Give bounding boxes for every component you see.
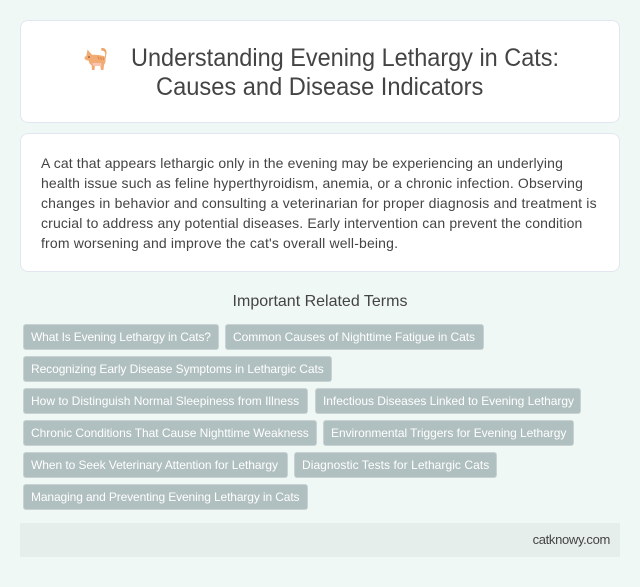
summary text: changes in behavior and consulting a veterinarian for proper diagnosis and treatment is xyxy=(41,195,597,211)
summary text: from worsening and improve the cat's overall well-being. xyxy=(41,235,398,251)
title card xyxy=(20,20,620,123)
tag xyxy=(225,324,484,350)
heading: Understanding Evening Lethargy in Cats: xyxy=(131,44,559,72)
summary text: health issue such as feline hyperthyroidism, anemia, or a chronic infection. Observing xyxy=(41,175,583,191)
icon: cat xyxy=(84,48,106,70)
tag xyxy=(315,388,581,414)
tag xyxy=(23,388,308,414)
tag: Diagnostic Tests for Lethargic Cats xyxy=(302,458,489,472)
tag: What Is Evening Lethargy in Cats? xyxy=(31,330,211,344)
heading xyxy=(131,44,559,101)
tag xyxy=(323,420,574,446)
tag xyxy=(23,324,219,350)
tag: Chronic Conditions That Cause Nighttime Weakness xyxy=(31,426,309,440)
tag xyxy=(23,356,332,382)
tag xyxy=(23,484,308,510)
footer xyxy=(20,523,620,557)
summary text: crucial to address any potential diseases. Early intervention can prevent the condition xyxy=(41,215,582,231)
tag: How to Distinguish Normal Sleepiness from Illness xyxy=(31,394,299,408)
tag: Infectious Diseases Linked to Evening Lethargy xyxy=(323,394,574,408)
tag: Environmental Triggers for Evening Lethargy xyxy=(331,426,566,440)
summary card xyxy=(20,133,620,272)
footer credit: catknowy.com xyxy=(533,532,610,547)
tag list xyxy=(23,324,581,510)
tag: Managing and Preventing Evening Lethargy in Cats xyxy=(31,490,299,504)
tag xyxy=(23,452,288,478)
related terms heading: Important Related Terms xyxy=(233,293,407,310)
tag: Recognizing Early Disease Symptoms in Lethargic Cats xyxy=(31,362,324,376)
heading: Causes and Disease Indicators xyxy=(156,73,483,101)
tag xyxy=(23,420,317,446)
tag: When to Seek Veterinary Attention for Lethargy xyxy=(31,458,278,472)
summary text: A cat that appears lethargic only in the evening may be experiencing an underlying xyxy=(41,155,563,171)
tag: Common Causes of Nighttime Fatigue in Cats xyxy=(233,330,475,344)
tag xyxy=(294,452,497,478)
summary text xyxy=(41,155,597,251)
